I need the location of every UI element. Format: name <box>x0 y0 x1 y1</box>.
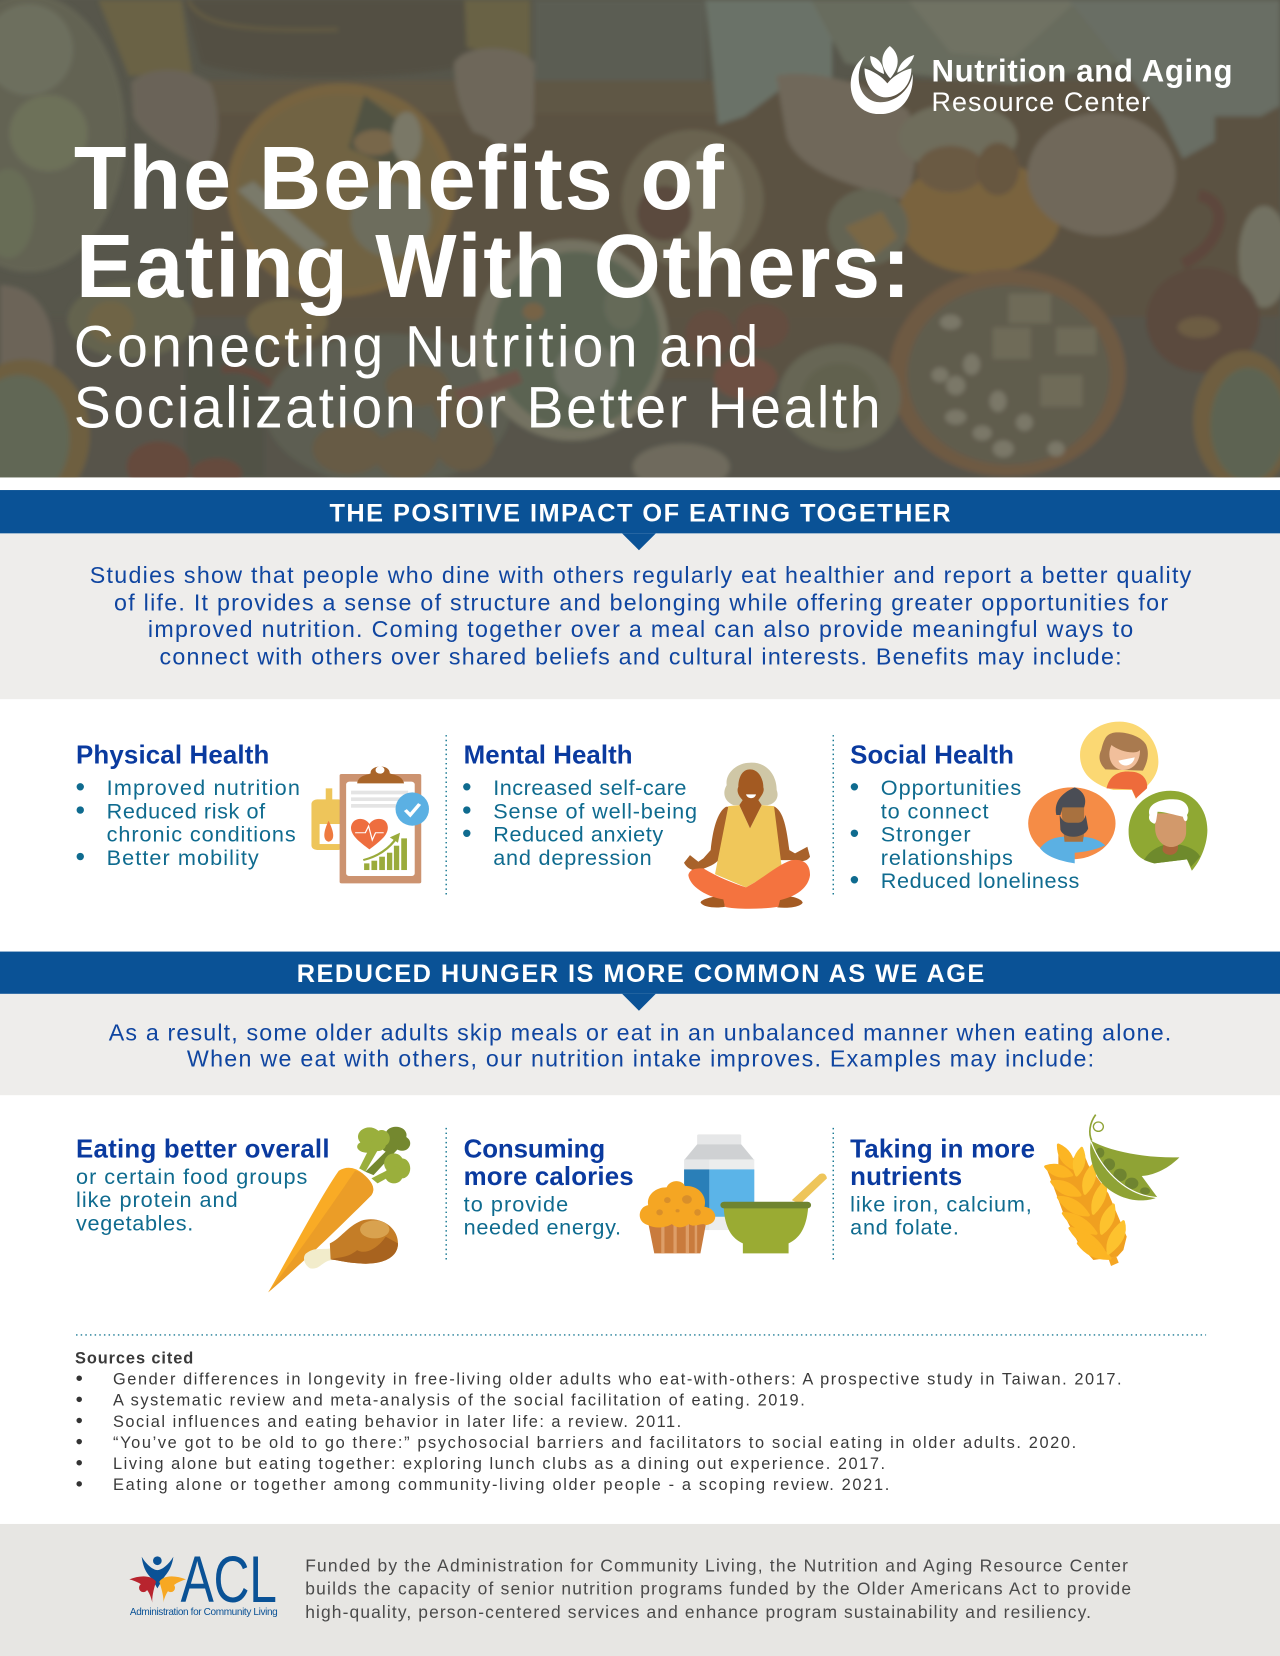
intro paragraph: Studies show that people who dine with others regularly eat healthier and report a better quality <box>90 562 1192 588</box>
title <box>74 128 910 316</box>
heading: Taking in more <box>850 1136 1035 1164</box>
bullet list: Better mobility <box>107 845 259 870</box>
icon: bowl with leaves <box>851 46 914 114</box>
description: or certain food groups <box>76 1164 307 1189</box>
icon: clipboard with heart and glucose meter <box>311 766 429 883</box>
intro paragraph: connect with others over shared beliefs and cultural interests. Benefits may include: <box>159 643 1122 669</box>
hero photo background: shared meal table <box>0 0 1280 511</box>
subtitle: Connecting Nutrition and <box>74 315 758 380</box>
bullet list: Sense of well-being <box>493 798 697 823</box>
intro paragraph: When we eat with others, our nutrition intake improves. Examples may include: <box>187 1046 1094 1072</box>
heading: more calories <box>464 1163 634 1191</box>
logo name: Nutrition and Aging <box>931 53 1232 88</box>
icon: carrot and drumstick <box>268 1127 410 1292</box>
description <box>850 1191 1032 1240</box>
sources list <box>76 1371 1122 1494</box>
icon: muffin, milk carton and bowl <box>640 1134 827 1253</box>
heading: Social Health <box>850 742 1014 770</box>
heading: Eating better overall <box>76 1136 330 1164</box>
panel: taking in more nutrients <box>850 1115 1179 1266</box>
intro paragraph <box>90 562 1192 669</box>
description: like iron, calcium, <box>850 1191 1032 1216</box>
funding statement: builds the capacity of senior nutrition programs funded by the Older Americans Act to provide <box>305 1579 1131 1599</box>
bullet list: Improved nutrition <box>107 775 300 800</box>
bullet list: Reduced anxiety <box>493 822 663 847</box>
title: Eating With Others: <box>76 215 910 316</box>
sources cited <box>75 1349 1122 1494</box>
funding statement: high-quality, person-centered services and enhance program sustainability and resiliency. <box>305 1602 1091 1622</box>
panel: mental health <box>463 742 810 909</box>
icon: wheat and peas <box>1046 1115 1179 1266</box>
bullet list: Increased self-care <box>493 775 686 800</box>
sources list: A systematic review and meta-analysis of the social facilitation of eating. 2019. <box>113 1392 805 1410</box>
heading: Consuming <box>464 1136 605 1164</box>
wordmark: ACL <box>181 1544 277 1617</box>
icon: three people in speech bubbles <box>1028 722 1207 871</box>
bullet list <box>77 775 300 870</box>
bullet list: to connect <box>881 798 989 823</box>
description <box>464 1191 621 1240</box>
heading <box>850 1136 1035 1191</box>
bullet list: relationships <box>881 845 1013 870</box>
sources list: Social influences and eating behavior in later life: a review. 2011. <box>113 1413 681 1431</box>
subtitle <box>74 315 881 441</box>
subtitle: Socialization for Better Health <box>74 376 881 441</box>
logo caption: Administration for Community Living <box>130 1607 278 1618</box>
bullet list: Stronger <box>881 822 971 847</box>
intro paragraph: improved nutrition. Coming together over a meal can also provide meaningful ways to <box>148 616 1133 642</box>
description: and folate. <box>850 1215 959 1240</box>
bullet list <box>851 775 1080 893</box>
panel: physical health <box>76 742 429 883</box>
sources list: “You’ve got to be old to go there:” psychosocial barriers and facilitators to social eating in older adults. 2020. <box>113 1434 1076 1452</box>
bullet list: Reduced loneliness <box>881 868 1080 893</box>
description: vegetables. <box>76 1210 193 1235</box>
logo: Administration for Community Living <box>129 1544 278 1618</box>
intro paragraph <box>109 1019 1171 1072</box>
heading: Physical Health <box>76 742 269 770</box>
icon: meditating woman <box>684 763 810 909</box>
bullet list: and depression <box>493 845 652 870</box>
sources list: Living alone but eating together: exploring lunch clubs as a dining out experience. 2017. <box>113 1455 885 1473</box>
heading: nutrients <box>850 1163 962 1191</box>
footer panel <box>0 1524 1280 1656</box>
bullet list <box>463 775 697 870</box>
panel: consuming more calories <box>464 1134 827 1253</box>
intro paragraph: of life. It provides a sense of structure and belonging while offering greater opportunities for <box>114 589 1168 615</box>
icon: three figures <box>129 1556 186 1603</box>
panel: eating better overall <box>76 1127 410 1292</box>
drumstick <box>304 1219 398 1269</box>
logo subtitle: Resource Center <box>931 87 1150 117</box>
heading: reduced hunger: REDUCED HUNGER IS MORE COMMON AS WE AGE <box>297 960 984 988</box>
description: to provide <box>464 1191 568 1216</box>
funding statement: Funded by the Administration for Community Living, the Nutrition and Aging Resource Center <box>305 1555 1128 1575</box>
description: like protein and <box>76 1187 238 1212</box>
description: needed energy. <box>464 1215 621 1240</box>
heading: Mental Health <box>464 742 633 770</box>
sources list: Eating alone or together among community-living older people - a scoping review. 2021. <box>113 1476 889 1494</box>
sources heading: Sources cited <box>75 1349 193 1367</box>
title: The Benefits of <box>74 128 724 229</box>
bullet list: chronic conditions <box>107 822 296 847</box>
bullet list: Reduced risk of <box>107 798 266 823</box>
description <box>76 1164 307 1235</box>
heading: positive impact: THE POSITIVE IMPACT OF EATING TOGETHER <box>330 500 950 528</box>
logo: Nutrition and Aging Resource Center <box>851 46 1232 117</box>
sources list: Gender differences in longevity in free-living older adults who eat-with-others: A prospective study in Taiwan. 2017. <box>113 1371 1122 1389</box>
heading <box>464 1136 634 1191</box>
panel: reduced hunger intro <box>0 952 1280 1095</box>
intro paragraph: As a result, some older adults skip meals or eat in an unbalanced manner when eating alone. <box>109 1019 1171 1045</box>
panel: positive impact intro <box>0 490 1280 699</box>
panel: social health <box>850 722 1207 893</box>
bullet list: Opportunities <box>881 775 1021 800</box>
funding statement <box>305 1555 1131 1622</box>
